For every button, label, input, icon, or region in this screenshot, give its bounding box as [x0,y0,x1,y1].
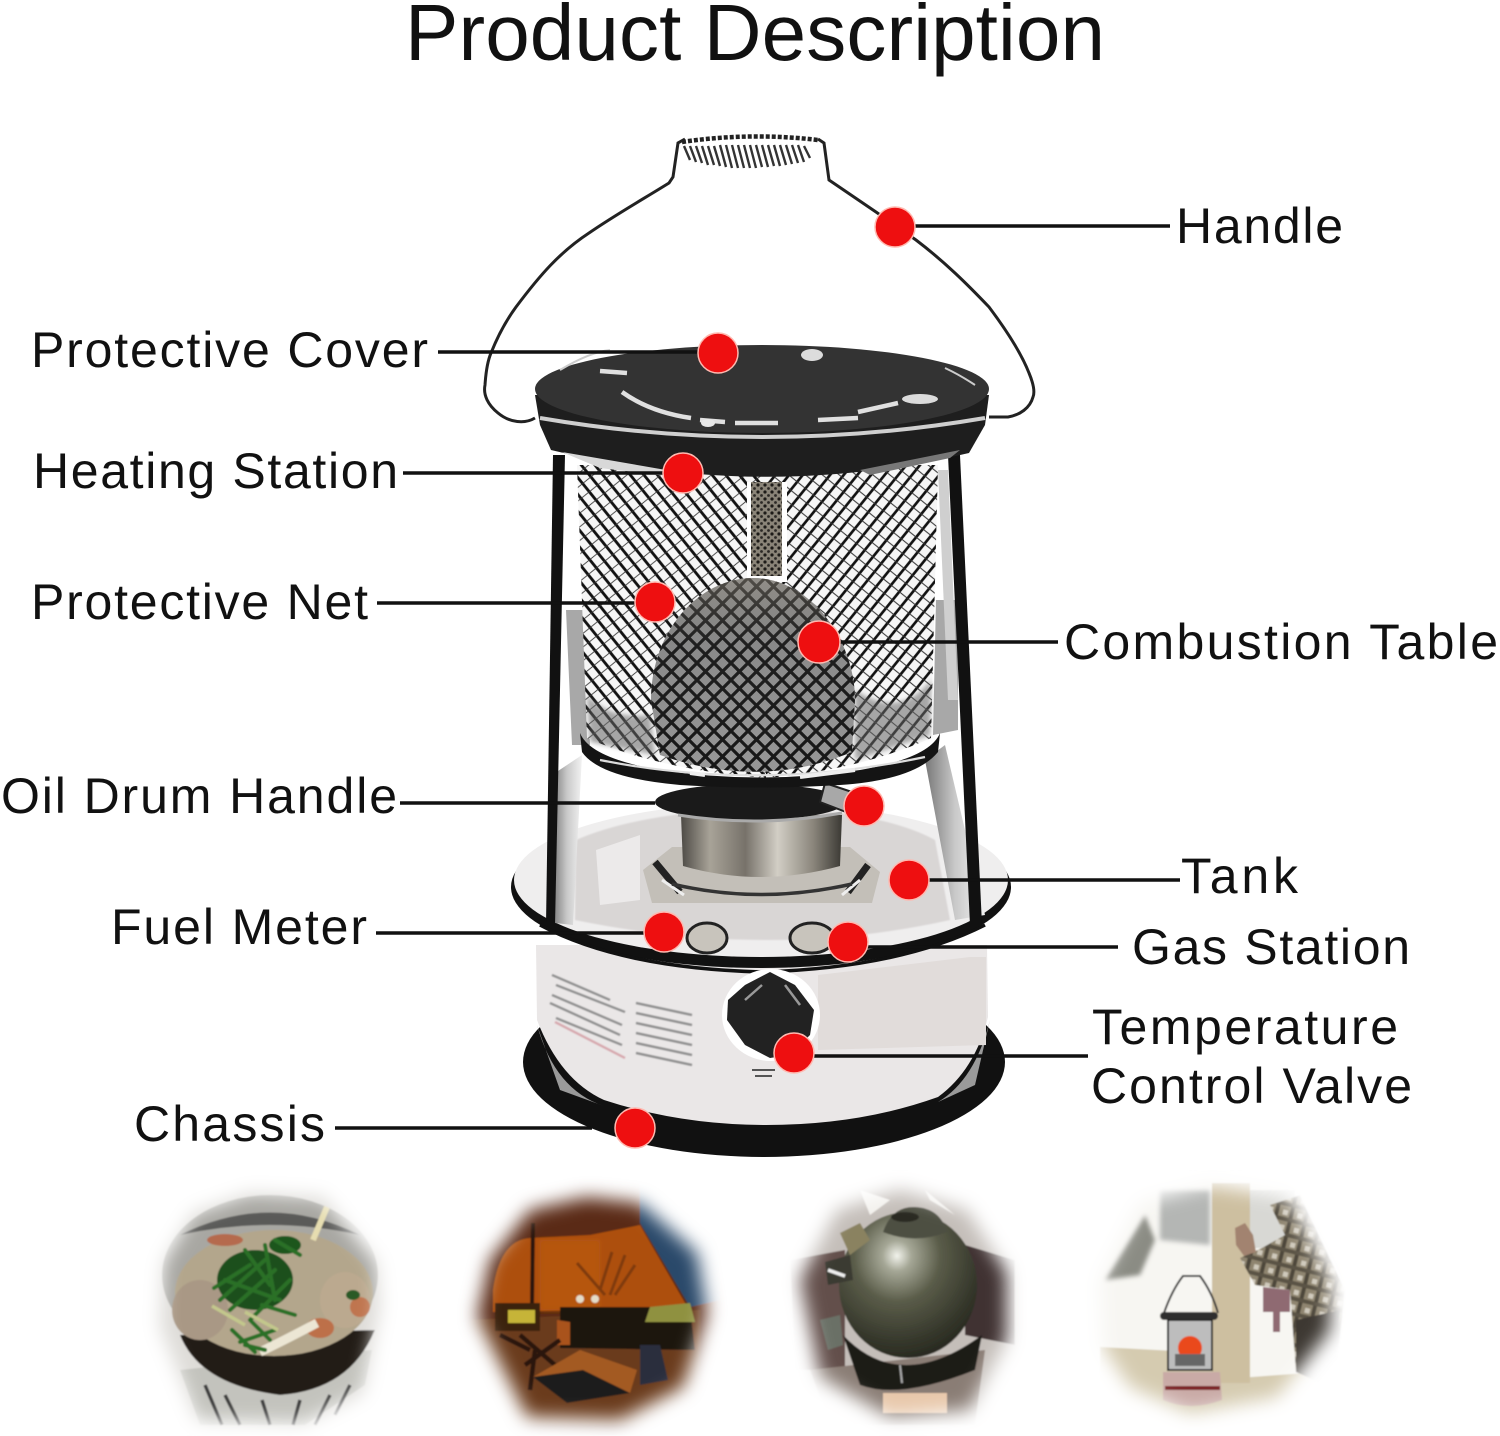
label: Temperature Control Valve [1091,999,1412,1114]
red marker dots [615,207,929,1148]
burner base plate [643,815,880,903]
label: Handle: Handle [1176,198,1343,254]
label: Temperature Control Valve: Temperature [1092,999,1398,1055]
label: Gas Station: Gas Station [1132,919,1410,975]
combustion dome [651,578,855,772]
burner cylinder [681,815,842,877]
inner lower legs [552,745,985,925]
label: Tank: Tank [1181,848,1299,904]
label: Oil Drum Handle: Oil Drum Handle [1,768,397,824]
protective net cylinder [577,465,766,778]
net bottom tray [580,733,940,788]
leader lines [335,226,1180,1128]
temperature control knob [722,969,820,1076]
photo: heated tent interior [464,1182,721,1435]
label: Temperature Control Valve: Control Valve [1091,1058,1412,1114]
tank body [536,945,988,1125]
warm-grey panel on tank [818,957,986,1050]
outer right leg [938,455,982,925]
label: Heating Station: Heating Station [33,443,398,499]
base ring chassis [523,967,1005,1157]
chimney tube [747,482,787,582]
label: Chassis: Chassis [134,1096,325,1152]
mini heater in photo [1160,1276,1222,1406]
label: Protective Net: Protective Net [31,574,368,630]
instruction label [550,975,692,1065]
grey side strips beside net [566,600,958,745]
grey shading in net base [587,680,931,760]
heater illustration [485,136,1034,1157]
photo: man at window with heater [1100,1182,1344,1422]
label: Fuel Meter: Fuel Meter [111,899,367,955]
label: Protective Cover: Protective Cover [31,322,428,378]
tank top flange [511,803,1011,972]
protective net cylinder right [766,465,938,778]
outer left leg [546,455,565,925]
label: Combustion Table: Combustion Table [1064,614,1498,670]
carrying handle wire [485,136,1034,422]
photo: kettle on heater [790,1182,1018,1426]
protective cover lid [535,345,989,477]
photo: hot pot soup [154,1187,386,1430]
burner collar [655,783,855,821]
fuel and gas knobs [687,923,834,953]
